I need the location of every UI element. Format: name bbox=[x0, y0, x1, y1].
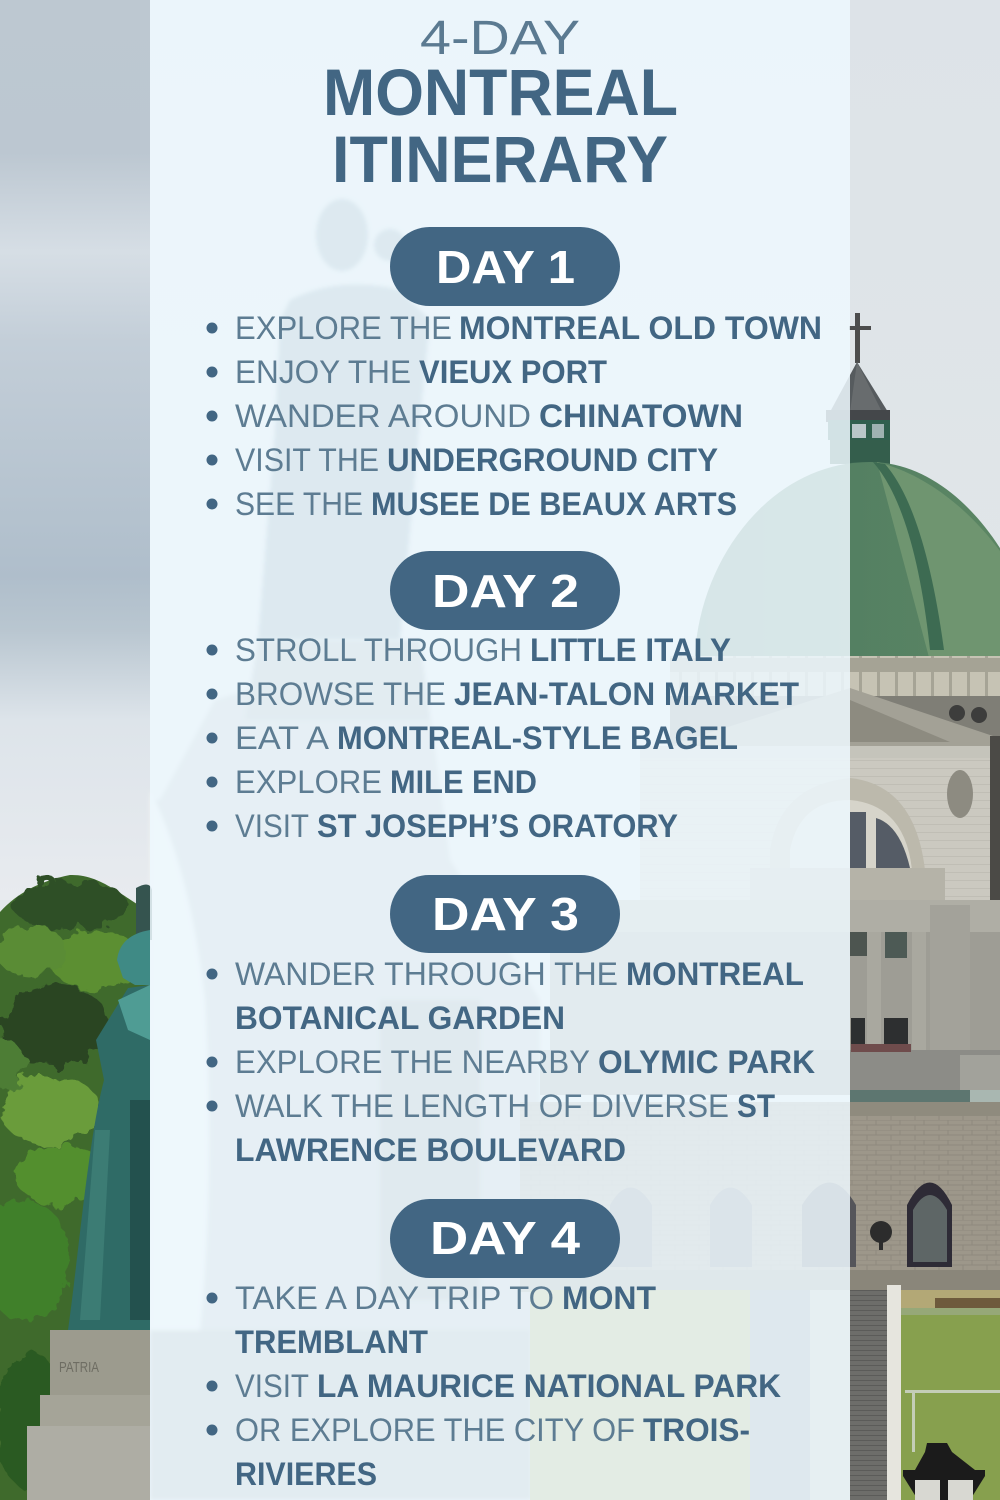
day 1 list: SEE THE bbox=[235, 486, 363, 522]
day 3 heading: DAY 3 bbox=[432, 888, 579, 940]
day 2 list bbox=[206, 632, 799, 844]
day 2 list: EAT A bbox=[235, 720, 330, 756]
photo: central statue bbox=[258, 199, 430, 640]
photo: trees on the left bbox=[0, 875, 150, 1500]
day 3 list: BOTANICAL GARDEN bbox=[235, 1000, 565, 1036]
day 2 list: VISIT bbox=[235, 808, 309, 844]
day 4 heading: DAY 4 bbox=[430, 1212, 580, 1264]
day 1 list: VISIT THE bbox=[235, 442, 379, 478]
day 3 list bbox=[206, 956, 815, 1168]
panel: day 3 bbox=[206, 875, 815, 1168]
day 1 list: VIEUX PORT bbox=[419, 354, 607, 390]
title: ITINERARY bbox=[332, 122, 668, 196]
photo: upper facade bbox=[640, 736, 1000, 906]
photo: green dome bbox=[695, 462, 1000, 690]
day 4 list: MONT bbox=[562, 1280, 656, 1316]
photo: foreground lamp bbox=[903, 1443, 985, 1500]
photo: statue pedestal: PATRIA bbox=[59, 1359, 99, 1376]
day 1 list: UNDERGROUND CITY bbox=[387, 442, 718, 478]
title: 4-DAY bbox=[420, 12, 580, 65]
day 2 list: LITTLE ITALY bbox=[530, 632, 731, 668]
day 1 heading bbox=[390, 227, 620, 306]
day 3 list: WALK THE LENGTH OF DIVERSE bbox=[235, 1088, 729, 1124]
day 3 list: OLYMIC PARK bbox=[598, 1044, 815, 1080]
day 1 list: ENJOY THE bbox=[235, 354, 411, 390]
day 1 list: WANDER AROUND bbox=[235, 398, 531, 434]
day 4 list: OR EXPLORE THE CITY OF bbox=[235, 1412, 635, 1448]
day 2 list: MONTREAL-STYLE BAGEL bbox=[337, 720, 738, 756]
day 2 list: EXPLORE bbox=[235, 764, 382, 800]
day 3 list: LAWRENCE BOULEVARD bbox=[235, 1132, 626, 1168]
day 1 list: CHINATOWN bbox=[539, 398, 743, 434]
day 4 list: TAKE A DAY TRIP TO bbox=[235, 1280, 554, 1316]
photo: female statue bbox=[68, 884, 152, 1330]
day 4 list: RIVIERES bbox=[235, 1456, 377, 1492]
day 4 heading bbox=[390, 1199, 620, 1278]
panel: day 4 bbox=[206, 1199, 781, 1492]
day 3 list: MONTREAL bbox=[626, 956, 804, 992]
day 4 list: VISIT bbox=[235, 1368, 309, 1404]
day 1 list: EXPLORE THE bbox=[235, 310, 452, 346]
photo: cross and lantern bbox=[826, 313, 890, 464]
title: MONTREAL bbox=[323, 55, 678, 129]
photo: stone monument bbox=[150, 640, 540, 1500]
day 2 heading: DAY 2 bbox=[432, 565, 579, 617]
panel: day 2 bbox=[206, 551, 799, 844]
day 2 heading bbox=[390, 551, 620, 630]
day 3 heading bbox=[390, 875, 620, 953]
panel: day 1 bbox=[206, 227, 822, 522]
day 1 list: MUSEE DE BEAUX ARTS bbox=[371, 486, 737, 522]
day 4 list: TROIS- bbox=[643, 1412, 750, 1448]
day 2 list: MILE END bbox=[390, 764, 537, 800]
photo: statue pedestal bbox=[27, 1330, 150, 1500]
day 2 list: ST JOSEPH’S ORATORY bbox=[317, 808, 678, 844]
photo: stairs and lawn bbox=[530, 1285, 1000, 1500]
day 3 list: WANDER THROUGH THE bbox=[235, 956, 618, 992]
photo: steps with people bbox=[540, 1044, 1000, 1102]
day 1 list bbox=[206, 310, 822, 522]
photo: colonnade bbox=[550, 900, 1000, 1055]
translucent panel bbox=[150, 0, 850, 1500]
day 1 list: MONTREAL OLD TOWN bbox=[459, 310, 822, 346]
day 4 list: TREMBLANT bbox=[235, 1324, 428, 1360]
day 2 list: JEAN-TALON MARKET bbox=[454, 676, 799, 712]
day 2 list: BROWSE THE bbox=[235, 676, 446, 712]
title bbox=[323, 12, 678, 196]
day 1 heading: DAY 1 bbox=[436, 241, 575, 293]
day 3 list: EXPLORE THE NEARBY bbox=[235, 1044, 590, 1080]
photo: drum and pediment bbox=[640, 656, 1000, 760]
day 2 list: STROLL THROUGH bbox=[235, 632, 522, 668]
day 3 list: ST bbox=[737, 1088, 775, 1124]
photo: lower stone wall bbox=[520, 1102, 1000, 1292]
day 4 list: LA MAURICE NATIONAL PARK bbox=[317, 1368, 781, 1404]
photo: basilica bbox=[520, 313, 1000, 1500]
day 4 list bbox=[206, 1280, 781, 1492]
